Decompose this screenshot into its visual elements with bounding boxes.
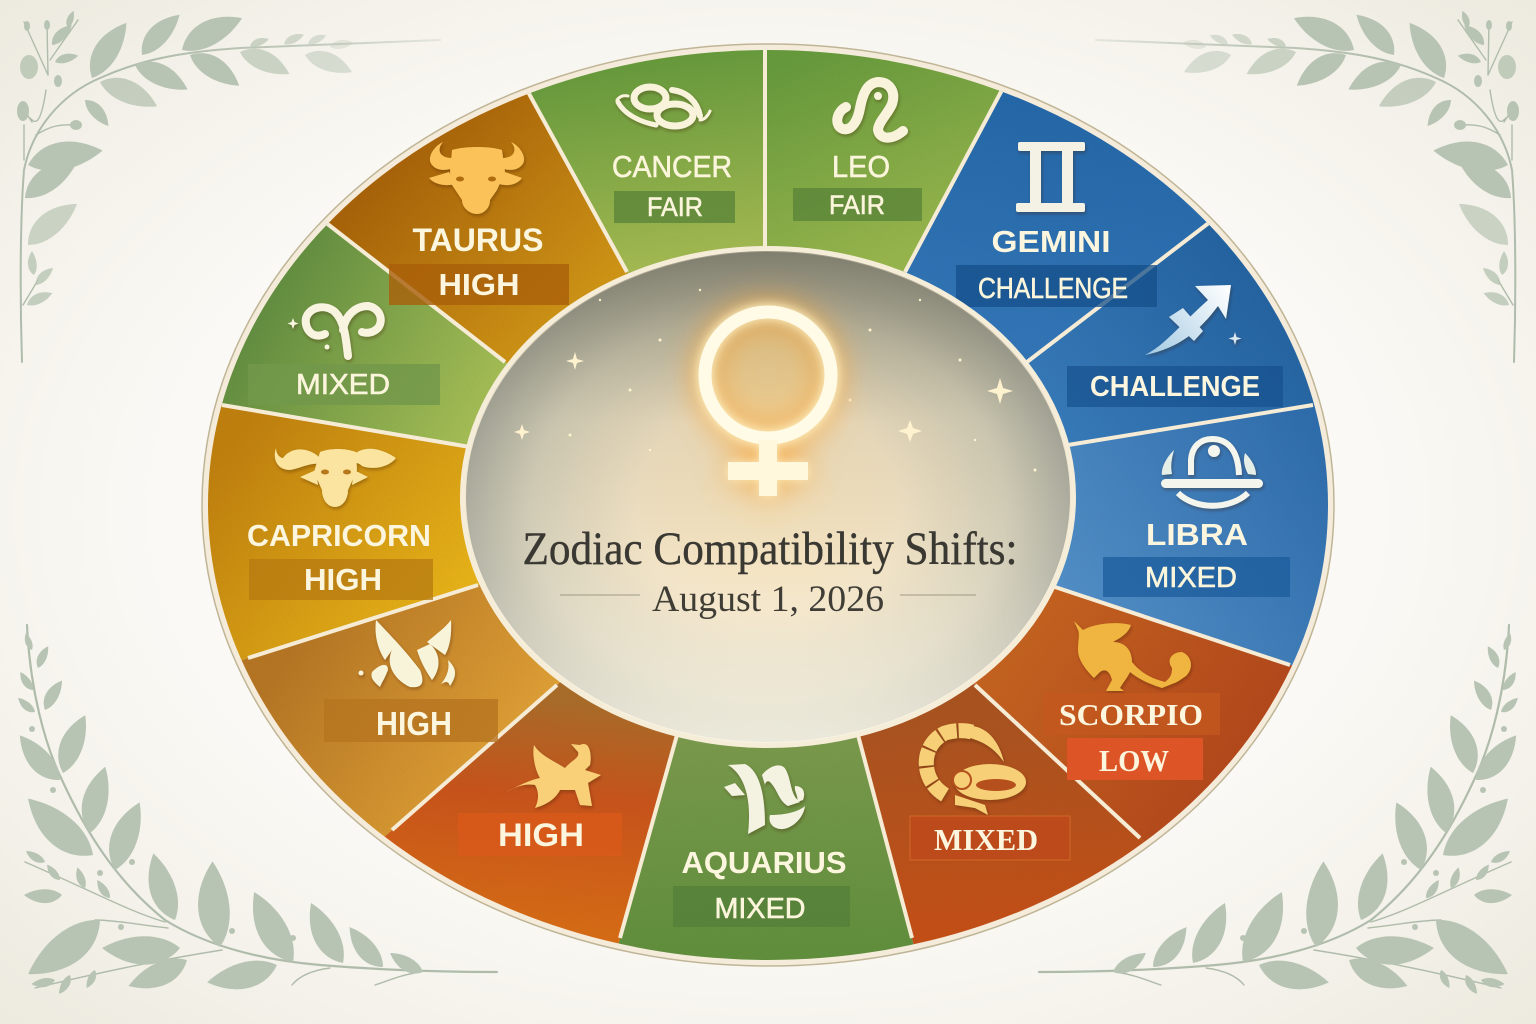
badge: horns high: HIGH [376,705,452,742]
badge: libra mixed: MIXED [1145,562,1237,594]
icon: aries [288,306,381,356]
badge: aries mixed [248,364,440,405]
icon: venus symbol [705,312,831,496]
badge: cancer fair: FAIR [647,192,703,222]
segment: Cancer [612,87,735,223]
badge: sagittarius challenge [1067,366,1283,407]
label: leo: LEO [832,149,890,184]
segment: Gemini [956,142,1157,307]
icon: bird [506,744,601,808]
label: taurus: TAURUS [412,222,544,258]
badge: scorpion mixed [910,816,1070,860]
foliage: top left corner [17,5,440,362]
label: aquarius: AQUARIUS [682,845,846,880]
badge: sagittarius challenge: CHALLENGE [1090,371,1260,403]
badge: capricorn high: HIGH [304,562,382,597]
segment: Leo [793,82,922,221]
segment: High bird [458,744,622,856]
badge: aquarius mixed [673,886,850,927]
label: gemini: GEMINI [992,224,1110,259]
title: Zodiac Compatibility Shifts: [522,523,1018,575]
segment: High horns [324,620,498,742]
icon: cancer [617,87,710,126]
icon: capricorn [275,448,396,507]
badge: capricorn high [249,559,433,600]
segment: Sagittarius [1067,285,1283,407]
icon: scorpio creature [1074,621,1191,691]
segment: Aries [248,306,440,405]
icon: horns [358,620,455,687]
badge: aries mixed: MIXED [296,369,390,401]
icon: taurus [429,142,524,214]
subtitle rules [560,594,976,596]
badge: gemini challenge: CHALLENGE [978,273,1128,305]
scorpio label plate [1043,693,1220,735]
badge: horns high [324,699,498,742]
badge: bird high [458,813,622,856]
centre background [463,249,1073,745]
segment: Aquarius [673,764,850,927]
subtitle: August 1, 2026 [652,579,884,620]
badge: gemini challenge [956,265,1157,307]
zodiac wheel rim [202,44,1334,966]
foliage: top right corner [1096,5,1519,362]
badge: scorpio low [1067,738,1203,780]
badge: taurus high [389,264,569,305]
segment: Scorpio [1043,621,1220,780]
foliage: bottom right corner [1039,625,1526,999]
centre panel [463,249,1073,745]
badge: taurus high: HIGH [438,267,520,302]
label: capricorn: CAPRICORN [247,518,431,553]
icon: gemini [1016,142,1085,212]
icon: sagittarius arrow [1145,285,1242,355]
segment: Capricorn [247,448,433,600]
icon: libra [1161,439,1263,506]
icon: leo [837,82,903,138]
stars [514,289,1036,472]
icon: aquarius [724,764,805,834]
icon: scorpion [926,726,1026,815]
foliage: bottom left corner [10,625,497,999]
badge: scorpio low: LOW [1099,743,1169,778]
badge: scorpion mixed: MIXED [934,822,1038,857]
segment: Taurus [389,142,569,305]
label: scorpio: SCORPIO [1059,697,1203,732]
segment fills [208,50,1328,960]
badge: aquarius mixed: MIXED [714,893,806,925]
label: cancer: CANCER [612,149,732,184]
badge: leo fair: FAIR [829,190,885,220]
badge: bird high: HIGH [498,817,584,853]
label: libra: LIBRA [1146,517,1248,552]
badge: libra mixed [1103,557,1290,597]
segment: Scorpion [910,726,1070,860]
segment: Libra [1103,439,1290,597]
